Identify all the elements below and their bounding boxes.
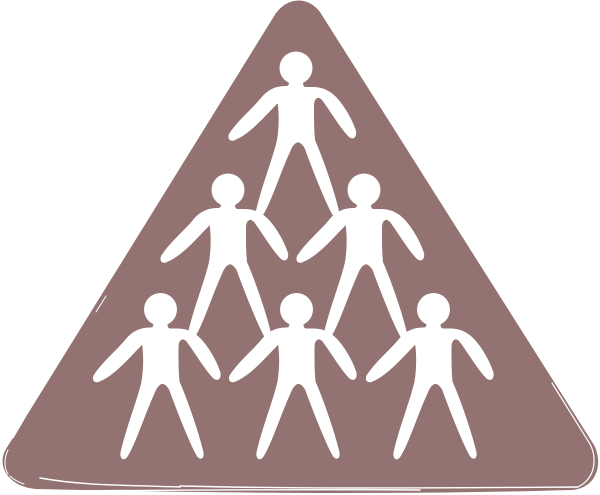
figure: bottom row left — [93, 293, 221, 459]
figure: top row — [228, 52, 356, 218]
figure: middle row left — [160, 174, 288, 340]
people pyramid — [93, 52, 494, 459]
figure: middle row right — [296, 174, 424, 340]
figure: bottom row right — [366, 293, 494, 459]
figure: bottom row centre — [229, 293, 357, 459]
